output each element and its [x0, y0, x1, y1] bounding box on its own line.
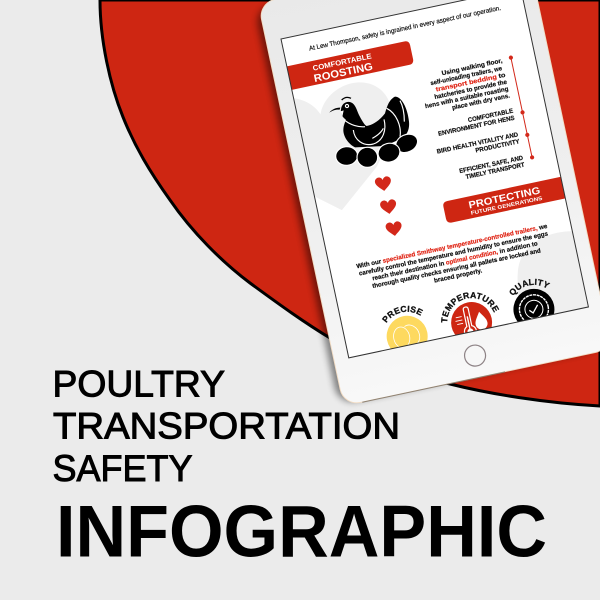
roosting paragraph: Using walking floor,: [441, 57, 503, 77]
title: [52, 364, 547, 573]
icon: precise eggs: [382, 306, 428, 348]
title: SAFETY: [52, 448, 192, 489]
protecting paragraph: braced properly.: [433, 267, 483, 285]
intro sentence: At Lew Thompson, safety is ingrained in every aspect of our operation.: [309, 5, 502, 53]
roosting paragraph: [424, 59, 510, 111]
protecting paragraph: carefully control the temperature and humidity to ensure the eggs: [358, 230, 549, 278]
icon: heart 1: [374, 176, 392, 192]
banner: comfortable roosting: COMFORTABLE: [312, 51, 372, 73]
roosting paragraph: transport bedding to: [435, 72, 506, 93]
banner: protecting future generations: PROTECTING: [468, 185, 542, 211]
banner: protecting future generations: FUTURE GENERATIONS: [470, 196, 544, 217]
roosting paragraph: hens with a suitable roasting: [425, 86, 509, 110]
banner: protecting future generations: [442, 176, 570, 224]
banner: comfortable roosting: ROOSTING: [313, 61, 374, 85]
title: TRANSPORTATION: [53, 405, 400, 446]
benefit list: EFFICIENT, SAFE, AND: [459, 155, 524, 175]
title: INFOGRAPHIC: [56, 490, 547, 573]
protecting paragraph: With our specialized Smithway temperature-controlled trailers, we: [356, 223, 548, 270]
tablet screen: [280, 0, 589, 358]
tablet mockup: [253, 0, 600, 406]
benefit list: PRODUCTIVITY: [475, 138, 521, 155]
icon: heart 3: [385, 221, 403, 237]
home button: [463, 343, 488, 368]
title: POULTRY: [52, 364, 225, 405]
icon: quality badge: [510, 278, 554, 322]
banner: comfortable roosting: [287, 40, 414, 90]
benefit list: BIRD HEALTH VITALITY AND: [436, 131, 519, 156]
background heart: roosting: [294, 82, 389, 210]
protecting paragraph: reach their destination in optimal condition, in addition to: [372, 240, 539, 282]
roosting paragraph: hatcheries to provide the: [434, 79, 508, 101]
benefit list: TIMELY TRANSPORT: [465, 162, 525, 181]
icon: temperature thermometer and droplet: TEMPERATURE: [441, 292, 500, 323]
protecting paragraph: thorough quality checks ensuring all pallets are locked and: [372, 247, 542, 290]
red curved backdrop: [100, 0, 600, 406]
roosting paragraph: self-unloading trailers, we: [430, 65, 503, 87]
benefit list: COMFORTABLE: [467, 108, 514, 124]
icon: temperature thermometer and droplet: [441, 292, 500, 335]
icon: quality badge: QUALITY: [510, 278, 550, 295]
roosting paragraph: place with dry vans.: [451, 92, 511, 112]
icon: precise eggs: PRECISE: [382, 306, 424, 323]
benefit list: [436, 108, 524, 179]
icon: hen on eggs: [329, 97, 421, 167]
icon: heart 2: [380, 199, 397, 215]
timeline: [508, 55, 535, 160]
background heart: lower right: [518, 232, 588, 314]
tablet body: [258, 0, 600, 406]
benefit list: ENVIRONMENT FOR HENS: [438, 115, 515, 138]
